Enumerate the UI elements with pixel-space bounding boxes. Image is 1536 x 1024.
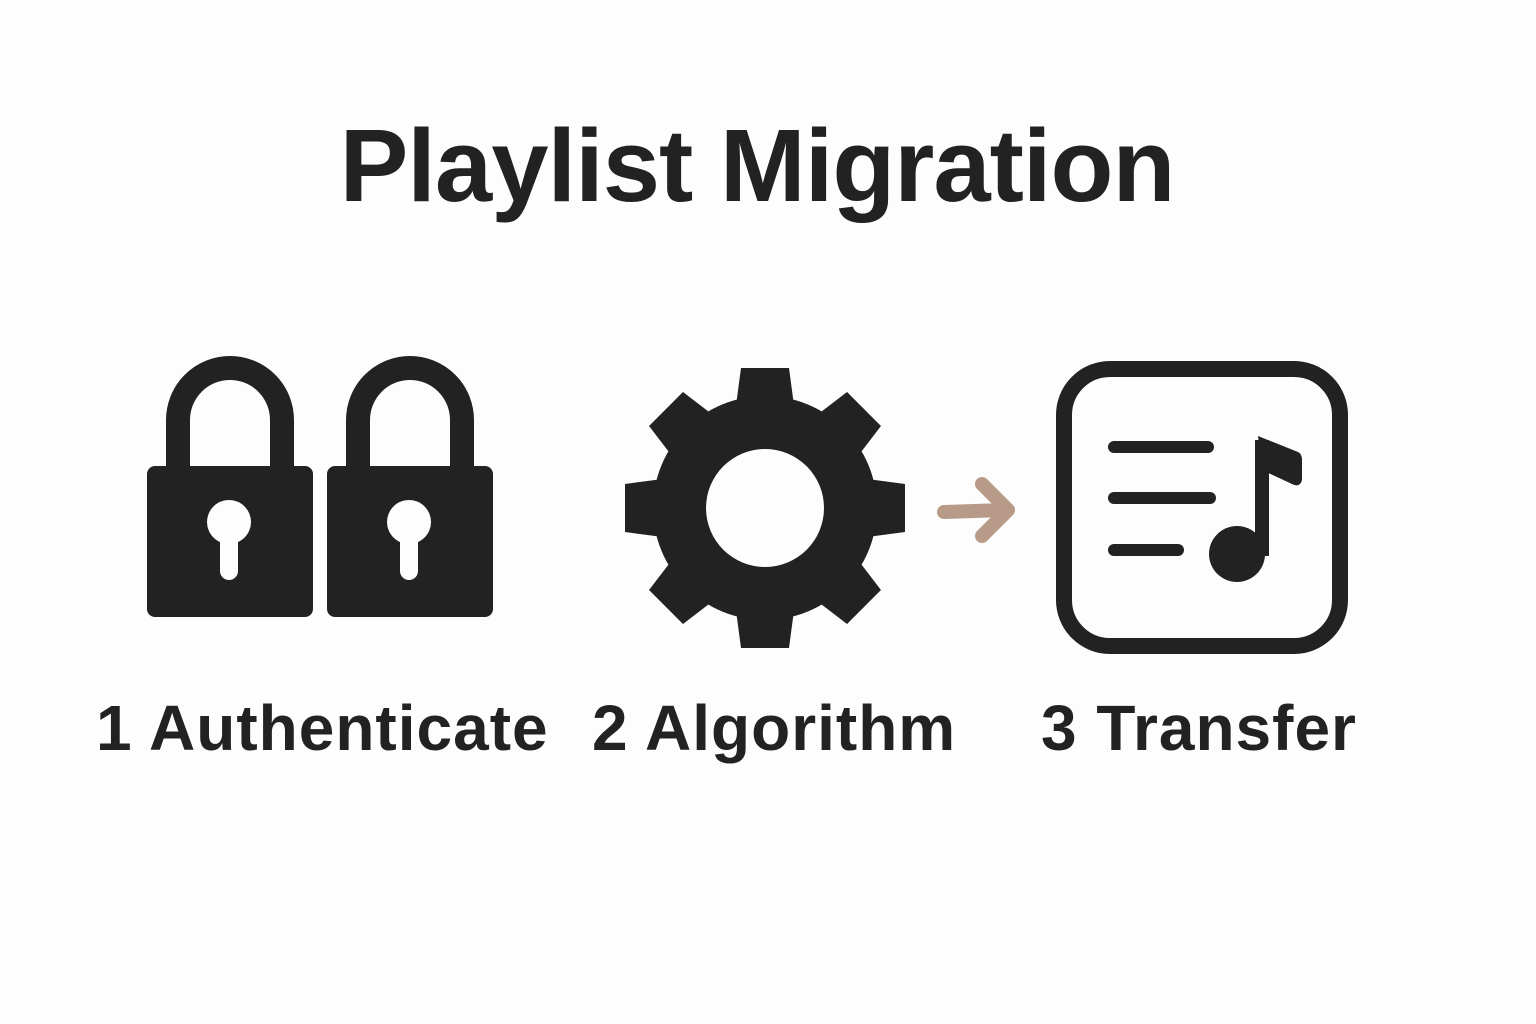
- label: step 3: 3 Transfer: [1041, 692, 1357, 764]
- arrow: [944, 484, 1008, 536]
- icon: playlist: [1064, 369, 1340, 646]
- title: Playlist Migration: [340, 108, 1174, 223]
- icon: lock 1: [147, 368, 313, 617]
- icon: lock 2: [327, 368, 493, 617]
- icon: gear: [625, 368, 905, 648]
- label: step 2: 2 Algorithm: [592, 692, 956, 764]
- label: step 1: 1 Authenticate: [96, 692, 549, 764]
